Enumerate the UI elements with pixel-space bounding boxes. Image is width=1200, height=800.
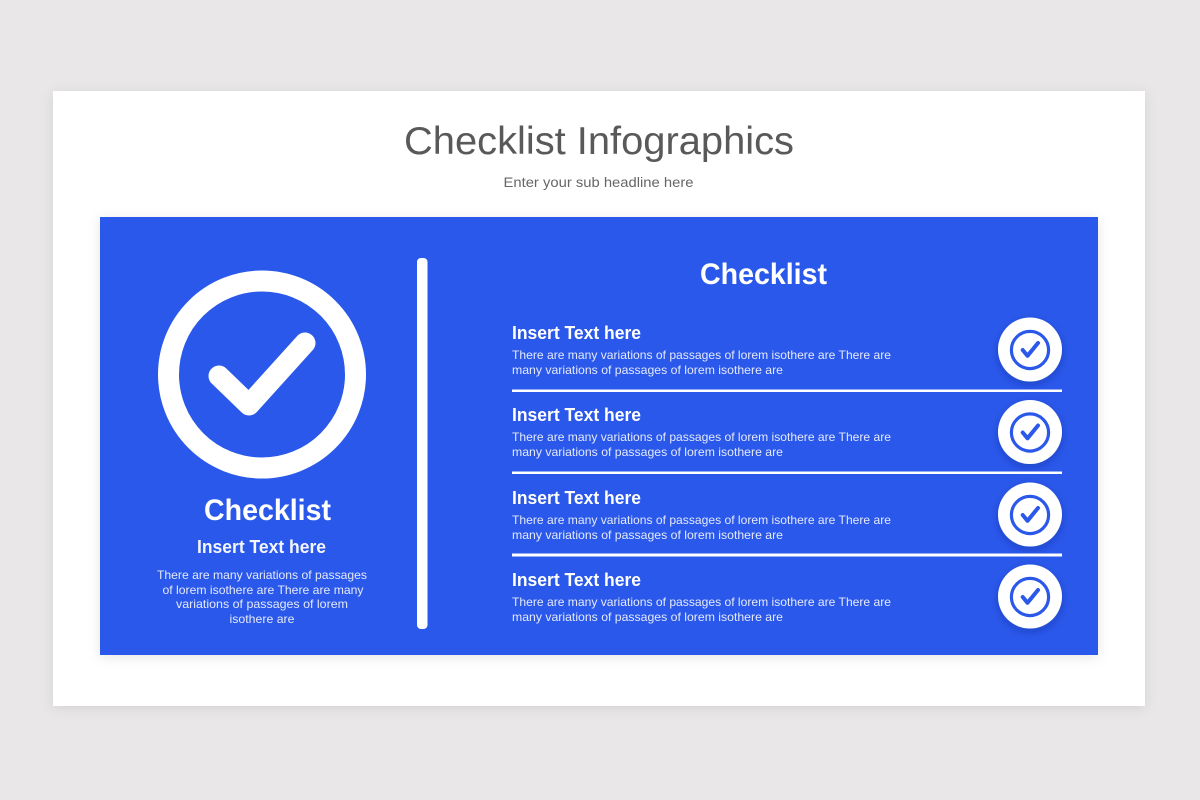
subtitle: Enter your sub headline here [504,174,694,190]
white slide card [53,91,1145,706]
left column [157,281,367,626]
checklist item 1: Insert Text here [512,323,641,343]
checklist item 3: Insert Text here [512,488,641,508]
icon: check badge 4 [998,564,1062,628]
checklist item 4: Insert Text here [512,570,641,590]
checklist item 3 [512,482,1062,546]
icon: large check circle [168,281,356,468]
left body text: variations of passages of lorem [176,597,348,611]
checklist item 3: There are many variations of passages of lorem isothere are There are [512,513,891,527]
left body text: There are many variations of passages [157,568,367,582]
checklist item 2: many variations of passages of lorem isothere are [512,445,783,459]
checklist item 4: There are many variations of passages of lorem isothere are There are [512,595,891,609]
checklist item 4 [512,564,1062,628]
vertical divider [417,258,428,629]
checklist item 3: many variations of passages of lorem isothere are [512,528,783,542]
left subheading: Insert Text here [197,537,326,557]
checklist item 2 [512,400,1062,464]
left body text: isothere are [230,612,295,626]
checklist item 4: many variations of passages of lorem isothere are [512,610,783,624]
left body text [157,568,367,626]
checklist item 1: many variations of passages of lorem isothere are [512,363,783,377]
checklist item 2: There are many variations of passages of lorem isothere are There are [512,430,891,444]
left body text: of lorem isothere are There are many [162,583,364,597]
left heading: Checklist [204,494,331,527]
checklist item 1 [512,318,1062,382]
icon: check badge 1 [998,318,1062,382]
checklist item 1: There are many variations of passages of lorem isothere are There are [512,348,891,362]
right heading: Checklist [700,258,827,291]
checklist item 2: Insert Text here [512,405,641,425]
panel: blue checklist [100,217,1098,655]
icon: check badge 3 [998,482,1062,546]
title: Checklist Infographics [404,120,794,163]
icon: check badge 2 [998,400,1062,464]
